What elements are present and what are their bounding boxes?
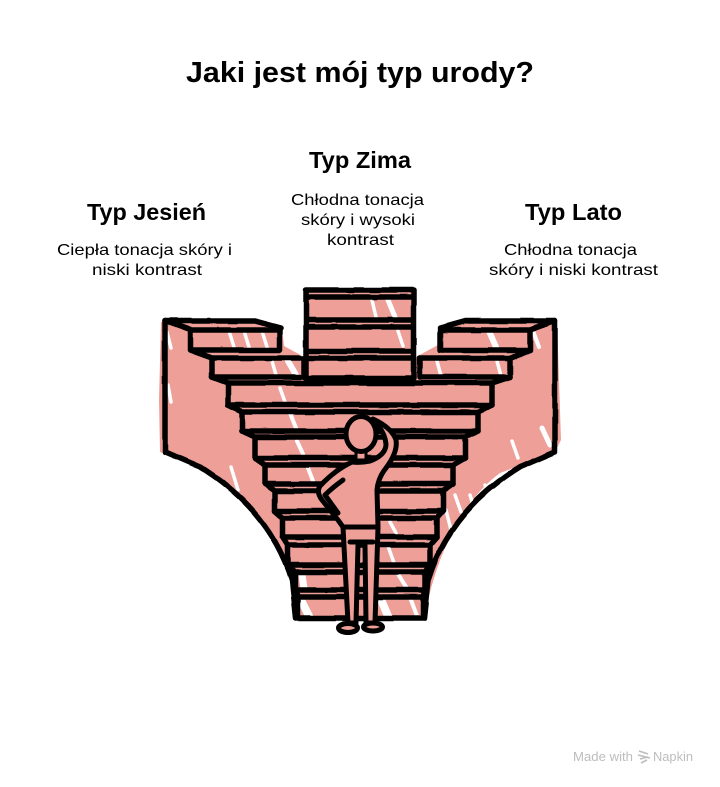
staircase illustration: [159, 288, 561, 632]
label: Typ Jesień: Typ Jesień: [87, 199, 206, 225]
label: Typ Lato: skóry i niski kontrast: [489, 262, 659, 279]
left wing outline: [165, 321, 296, 618]
label: Typ Lato: Typ Lato: [525, 199, 622, 225]
label: Typ Zima: [291, 147, 424, 249]
label: Typ Zima: Chłodna tonacja: [291, 192, 424, 209]
inner arm line: [325, 480, 343, 513]
label: Typ Jesień: Ciepła tonacja skóry i: [57, 242, 232, 259]
title: Jaki jest mój typ urody?: [186, 57, 534, 89]
pink fill with scribble: [159, 288, 561, 618]
label: Typ Lato: [489, 199, 659, 279]
person scratching head: [318, 416, 396, 632]
footer: Made with Napkin: Made with: [573, 750, 633, 764]
label: Typ Jesień: niski kontrast: [92, 262, 203, 279]
label: Typ Jesień: [57, 199, 232, 279]
footer: Made with Napkin: Napkin: [653, 750, 693, 764]
lower steps: [212, 377, 510, 405]
label: Typ Lato: Chłodna tonacja: [504, 242, 637, 259]
neck: [356, 448, 366, 460]
label: Typ Zima: Typ Zima: [309, 147, 411, 173]
feet: [338, 624, 358, 632]
icon: Napkin logo: [638, 751, 650, 763]
outlines of the steps: [165, 290, 555, 618]
right wing outline: [424, 321, 555, 618]
label: Typ Zima: kontrast: [327, 232, 395, 249]
torso and arms: [318, 419, 396, 527]
legs: [343, 527, 378, 623]
centre column: [306, 290, 414, 378]
right upper steps: [420, 321, 555, 377]
label: Typ Zima: skóry i wysoki: [301, 212, 415, 229]
footer: Made with Napkin: [573, 750, 693, 764]
left upper steps: [165, 321, 300, 377]
head: [346, 416, 376, 452]
